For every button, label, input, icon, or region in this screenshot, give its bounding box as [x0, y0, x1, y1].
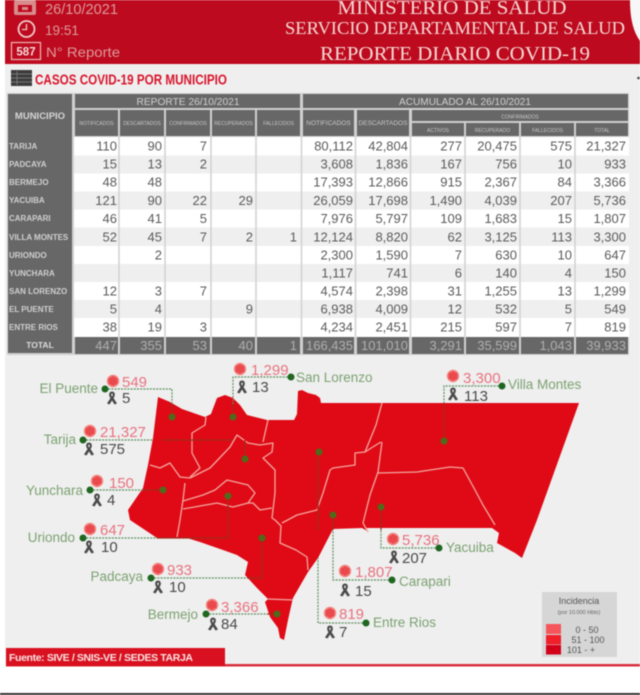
callout: Yacuiba: 5,736 [402, 532, 440, 549]
header cells [8, 94, 628, 354]
callout: Uriondo: 10 [101, 539, 118, 556]
callout: Yacuiba: 207 [402, 550, 427, 567]
callout: Yacuiba [381, 530, 494, 567]
row: Entre Rios: 19 [148, 320, 162, 334]
legend: incidencia: 0 - 50 [575, 625, 599, 635]
row: Carapari: 5,797 [375, 211, 408, 226]
header labels: MUNICIPIO [15, 111, 65, 122]
row: Villa Montes: 8,820 [375, 230, 408, 244]
row: Villa Montes: 3,300 [593, 230, 626, 244]
row: San Lorenzo: 3 [155, 284, 162, 298]
header labels: ACTIVOS [427, 128, 450, 134]
row: Carapari: 15 [558, 211, 572, 226]
row: Yunchara: 741 [386, 266, 408, 280]
callout: Entre Rios: 819 [339, 606, 364, 623]
row: Bermejo: 2,367 [484, 174, 517, 190]
row: Villa Montes: 1 [290, 230, 297, 244]
row: Yacuiba [9, 193, 626, 208]
row: Total: 35,599 [477, 338, 517, 353]
row: Yacuiba: 29 [239, 193, 253, 208]
row: Carapari: 5 [200, 211, 207, 226]
callout: Entre Rios [318, 558, 436, 641]
row: Yunchara: 6 [455, 266, 462, 280]
row: Yunchara: 4 [565, 266, 572, 280]
row: Total: TOTAL [26, 340, 54, 350]
callout: Villa Montes: 3,300 [463, 370, 501, 387]
row: Tarija: 21,327 [586, 138, 626, 154]
callout: Uriondo: Uriondo [28, 530, 75, 545]
callout: Villa Montes [444, 370, 582, 405]
row: Total: 1 [290, 338, 297, 353]
header labels: CONFIRMADOS [169, 121, 207, 127]
row: Yacuiba: 121 [95, 193, 117, 208]
row: El Puente: 549 [604, 302, 626, 316]
row: El Puente [9, 302, 626, 316]
row: Tarija: 7 [200, 138, 207, 154]
callout: El Puente: El Puente [39, 381, 98, 396]
row: Yacuiba: 90 [148, 193, 162, 208]
row: Yacuiba: 26,059 [313, 193, 353, 208]
row: Padcaya [9, 156, 626, 172]
row: Villa Montes: 12,124 [313, 230, 353, 244]
row: Yunchara: 1,117 [321, 266, 353, 280]
row: Uriondo: 647 [604, 248, 626, 262]
callout: Carapari: Carapari [399, 574, 451, 589]
header labels: DESCARTADOS [123, 121, 161, 127]
callout: San Lorenzo [233, 362, 373, 404]
header labels: DESCARTADOS [359, 120, 408, 127]
row: Padcaya: 2 [200, 156, 207, 172]
row: San Lorenzo: 13 [558, 284, 572, 298]
footer source bar: Fuente: SIVE / SNIS-VE / SEDES TARJA [9, 652, 193, 664]
row: Yacuiba: 17,698 [368, 193, 408, 208]
row: Bermejo: 915 [440, 174, 462, 190]
row: El Puente: 5 [110, 302, 117, 316]
legend: incidencia: Incidencia [559, 596, 599, 606]
row: El Puente: 12 [448, 302, 462, 316]
row: Carapari: 7,976 [320, 211, 353, 226]
white shield corner [630, 0, 640, 41]
row: Villa Montes: 52 [103, 230, 117, 244]
row: Entre Rios [9, 320, 626, 334]
row: Villa Montes [9, 230, 626, 244]
callout: Entre Rios: 7 [339, 624, 347, 641]
callout: Carapari [333, 530, 451, 600]
callout: Padcaya [90, 562, 247, 596]
section heading: CASOS COVID-19 POR MUNICIPIO [35, 72, 227, 88]
row: Entre Rios: 3 [200, 320, 207, 334]
row: Tarija: 90 [148, 138, 162, 154]
row: Tarija: 20,475 [477, 138, 517, 154]
row: Entre Rios: 597 [495, 320, 517, 334]
row: Padcaya: 933 [604, 156, 626, 172]
callout: Padcaya: 933 [167, 562, 192, 579]
header labels: NOTIFICADOS [306, 120, 351, 127]
callout: Bermejo: Bermejo [148, 607, 198, 622]
row: San Lorenzo: 31 [448, 284, 462, 298]
icon: clock [18, 21, 34, 37]
callout: Yunchara: 150 [109, 475, 134, 492]
row: Bermejo: 84 [558, 174, 572, 190]
icon: calendar [14, 0, 36, 15]
row: Padcaya: 3,608 [320, 156, 353, 172]
callout: Uriondo: 647 [100, 522, 125, 539]
row: Yacuiba: YACUIBA [9, 196, 45, 205]
callout: Villa Montes: Villa Montes [508, 377, 582, 392]
row: El Puente: 5 [565, 302, 572, 316]
callout: Padcaya: 10 [169, 579, 186, 596]
row: Tarija: 575 [550, 138, 572, 154]
row: San Lorenzo: 12 [103, 284, 117, 298]
legend: incidencia: 101 - + [567, 645, 595, 655]
row: Padcaya: 13 [148, 156, 162, 172]
row: Carapari: 109 [440, 211, 462, 226]
title: servicio: SERVICIO DEPARTAMENTAL DE SALUD [285, 18, 625, 38]
row: Total: 53 [193, 338, 207, 353]
date: 26/10/2021 [45, 2, 118, 18]
map: municipios de Tarija [128, 390, 579, 640]
row: Tarija: TARIJA [9, 142, 38, 151]
row: Carapari: 46 [103, 211, 117, 226]
bottom dark edge [0, 693, 640, 695]
row: Yunchara: 150 [604, 266, 626, 280]
title: reporte: REPORTE DIARIO COVID-19 [320, 43, 590, 65]
report number box [12, 42, 40, 60]
header labels: CONFIRMADOS [501, 114, 539, 120]
callout: El Puente [39, 374, 172, 407]
report number box: 587 [16, 46, 36, 58]
row: Yacuiba: 22 [193, 193, 207, 208]
row: Carapari [9, 211, 626, 226]
row: Yacuiba: 207 [550, 193, 572, 208]
row: San Lorenzo: 1,299 [593, 284, 626, 298]
row: Tarija: 110 [96, 138, 117, 154]
row: Bermejo: 17,393 [313, 174, 353, 190]
row: San Lorenzo: SAN LORENZO [9, 287, 67, 296]
row: Tarija: 42,804 [368, 138, 408, 154]
row: El Puente: 4 [155, 302, 162, 316]
callout: San Lorenzo: 1,299 [251, 362, 289, 379]
table: casos por municipio [7, 93, 629, 355]
callout: Tarija: 575 [100, 441, 125, 458]
row: Padcaya: 167 [440, 156, 462, 172]
row: Entre Rios: 2,451 [375, 320, 408, 334]
callout: Tarija [44, 424, 153, 458]
callout: Yacuiba: Yacuiba [446, 540, 494, 555]
callout: Tarija: 21,327 [100, 424, 146, 441]
callout: Yunchara [26, 475, 143, 509]
row: Padcaya: 756 [495, 156, 517, 172]
row: Padcaya: 10 [558, 156, 572, 172]
row: San Lorenzo: 1,255 [484, 284, 517, 298]
legend: incidencia: (por 10.000 Hbts) [558, 610, 601, 616]
row: Yunchara: 140 [495, 266, 517, 280]
row: Padcaya: 1,836 [375, 156, 408, 172]
row: Bermejo: 12,866 [368, 174, 408, 190]
row: Carapari: 1,807 [593, 211, 626, 226]
row: San Lorenzo: 2,398 [375, 284, 408, 298]
row: Uriondo: 7 [455, 248, 462, 262]
header labels: FALLECIDOS [263, 121, 295, 127]
row: Carapari: CARAPARI [9, 214, 51, 223]
callout: Yunchara: 4 [107, 492, 115, 509]
map dots [160, 414, 448, 618]
row: Entre Rios: 7 [565, 320, 572, 334]
header labels: FALLECIDOS [532, 128, 564, 134]
row: Uriondo: 2 [155, 248, 162, 262]
row: Bermejo: 48 [148, 174, 162, 190]
callout: San Lorenzo: 13 [252, 379, 269, 396]
callout: Carapari: 1,807 [355, 564, 393, 581]
row: Yunchara: YUNCHARA [9, 269, 55, 278]
header labels: REPORTE 26/10/2021 [136, 96, 240, 108]
row: Villa Montes: 62 [448, 230, 462, 244]
row: Total [26, 338, 626, 353]
header labels: RECUPERADO [475, 128, 510, 134]
map silhouette [128, 390, 579, 640]
legend: incidencia: 51 - 100 [571, 635, 605, 645]
row: Bermejo: 3,366 [593, 174, 626, 190]
row: Entre Rios: 4,234 [320, 320, 353, 334]
callout: Padcaya: Padcaya [90, 569, 143, 584]
callout: Tarija: Tarija [44, 432, 76, 447]
row: Uriondo: 630 [495, 248, 517, 262]
section heading [11, 70, 227, 88]
row: Villa Montes: 3,125 [484, 230, 517, 244]
callout: Villa Montes: 113 [464, 388, 488, 405]
row: Entre Rios: 819 [604, 320, 626, 334]
row: Total: 3,291 [429, 338, 462, 353]
row: San Lorenzo: 7 [200, 284, 207, 298]
header labels: TOTAL [594, 128, 610, 134]
row: Bermejo: BERMEJO [9, 178, 49, 187]
dark mark at right edge [637, 77, 640, 79]
callout: San Lorenzo: San Lorenzo [296, 370, 373, 385]
row: El Puente: EL PUENTE [9, 305, 54, 314]
row: El Puente: 6,938 [320, 302, 353, 316]
callout: Uriondo [28, 522, 157, 556]
row: El Puente: 4,009 [375, 302, 408, 316]
row: Tarija: 277 [440, 138, 462, 154]
callout: Bermejo: 3,366 [221, 599, 259, 616]
row: Uriondo: 1,590 [375, 248, 408, 262]
row: Uriondo: URIONDO [9, 251, 47, 260]
header labels: RECUPERADOS [214, 121, 253, 127]
callout: Bermejo: 84 [221, 616, 238, 633]
row: Total: 355 [140, 338, 162, 353]
row: Yacuiba: 4,039 [484, 193, 517, 208]
row: El Puente: 532 [495, 302, 517, 316]
row: Tarija [9, 138, 626, 154]
footer source bar [6, 648, 640, 666]
row: Uriondo: 2,300 [320, 248, 353, 262]
row: Padcaya: 15 [103, 156, 117, 172]
row: Total: 166,435 [306, 338, 353, 353]
header labels: ACUMULADO AL 26/10/2021 [399, 96, 531, 108]
row: Uriondo: 10 [558, 248, 572, 262]
row: Villa Montes: 45 [148, 230, 162, 244]
header band [5, 0, 640, 65]
row: El Puente: 9 [246, 302, 253, 316]
row: Carapari: 41 [148, 211, 162, 226]
row: Total: 447 [95, 338, 117, 353]
header labels: NOTIFICADOS [79, 121, 114, 127]
row: Padcaya: PADCAYA [9, 160, 47, 169]
row: San Lorenzo [9, 284, 626, 298]
leader lines inside map [143, 403, 444, 614]
row: Total: 39,933 [586, 338, 626, 353]
callout: Yunchara: Yunchara [26, 483, 83, 498]
row: Villa Montes: 7 [200, 230, 207, 244]
row: Yunchara [9, 266, 626, 280]
row: Entre Rios: ENTRE RIOS [9, 323, 59, 332]
row: Yacuiba: 1,490 [429, 193, 462, 208]
legend: incidencia [542, 592, 617, 657]
row: Entre Rios: 215 [440, 320, 462, 334]
row: San Lorenzo: 4,574 [320, 284, 353, 298]
callout: Bermejo [148, 599, 267, 633]
callout: El Puente: 5 [122, 390, 130, 407]
callout: Entre Rios: Entre Rios [373, 615, 436, 630]
row: Villa Montes: 2 [246, 230, 253, 244]
row: Total: 101,010 [361, 338, 408, 353]
header labels [15, 96, 610, 134]
row: Villa Montes: VILLA MONTES [9, 233, 69, 242]
callout: Carapari: 15 [355, 583, 372, 600]
row: Villa Montes: 113 [551, 230, 572, 244]
row: Bermejo [9, 174, 626, 190]
callout: El Puente: 549 [122, 374, 147, 391]
row: Carapari: 1,683 [484, 211, 517, 226]
municipal boundaries [150, 403, 495, 600]
row: Yacuiba: 5,736 [593, 193, 626, 208]
time: 19:51 [45, 23, 79, 38]
table stripes [74, 137, 629, 337]
row: Bermejo: 48 [103, 174, 117, 190]
report label: N° Reporte [46, 44, 120, 60]
icon: table [11, 70, 32, 86]
row: Uriondo [9, 248, 626, 262]
row: Tarija: 80,112 [314, 138, 353, 154]
row: Total: 40 [239, 338, 253, 353]
row: Total: 1,043 [539, 338, 572, 353]
row: Entre Rios: 38 [103, 320, 117, 334]
